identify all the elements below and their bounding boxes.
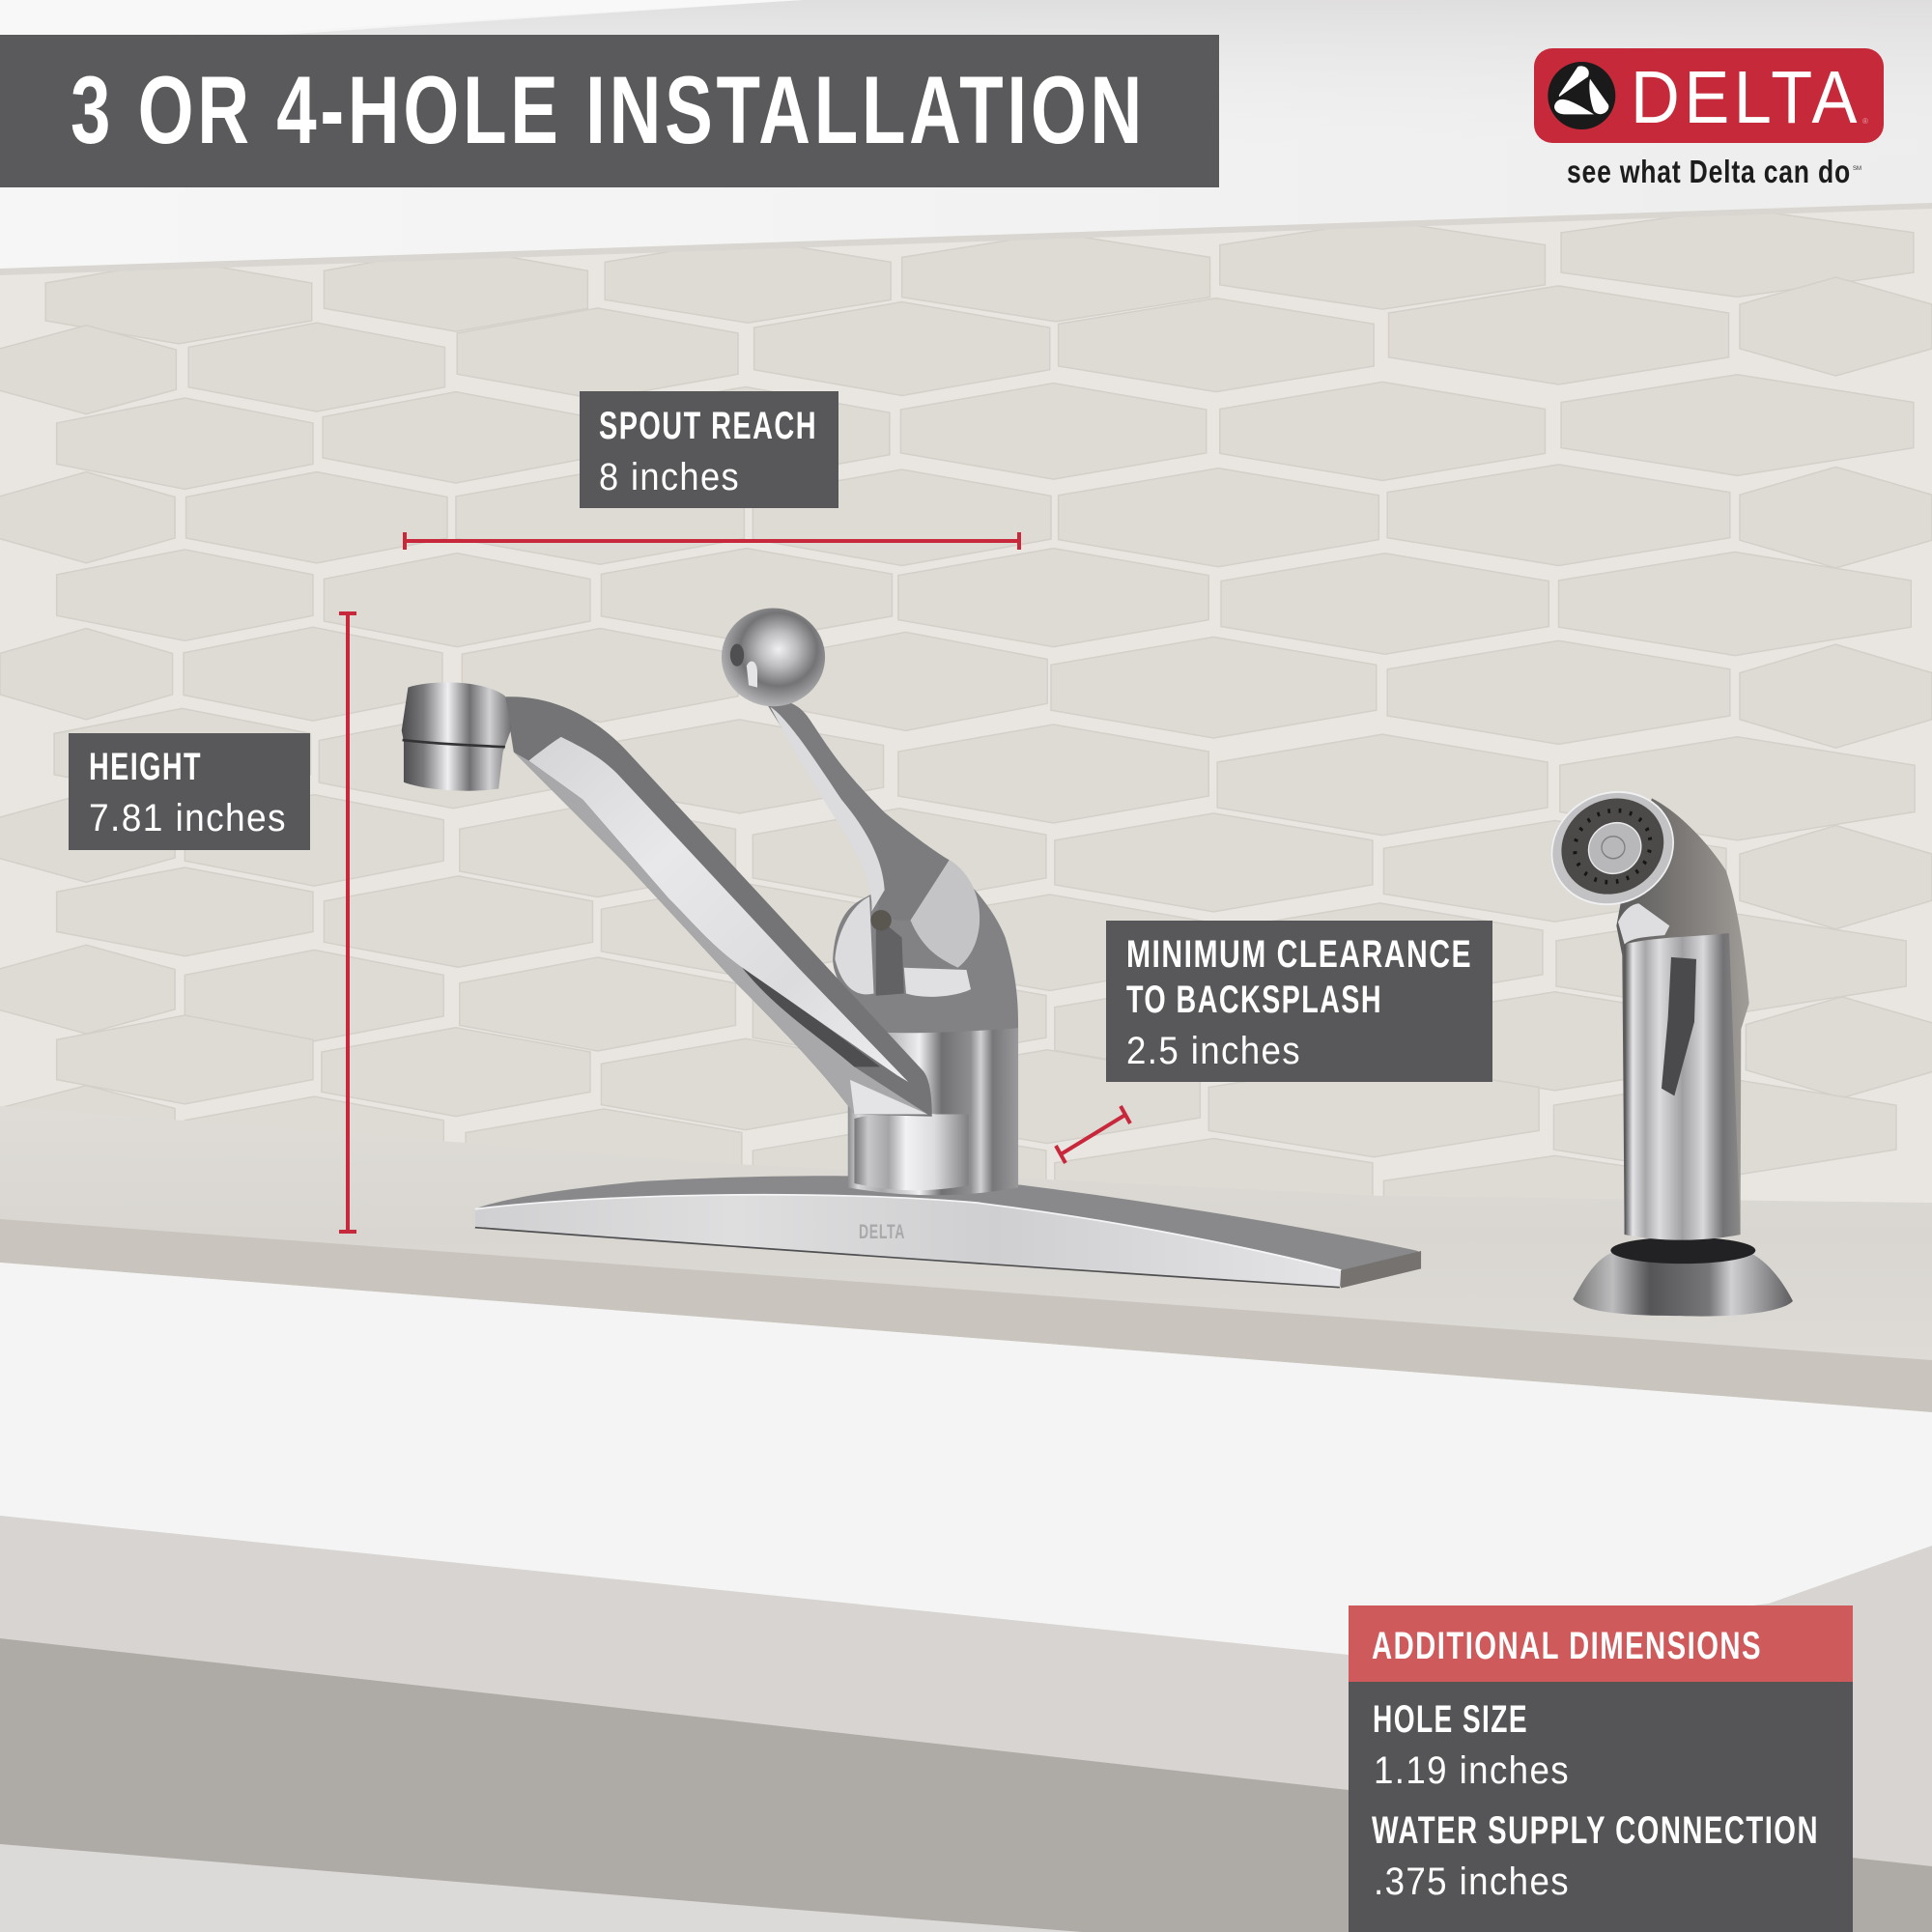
spout reach dimension line	[405, 532, 1019, 550]
water supply value: .375 inches	[1374, 1861, 1570, 1903]
height dimension line	[339, 613, 356, 1232]
spout	[505, 696, 932, 1117]
sprayer holes	[1569, 803, 1656, 890]
sprayer face	[1553, 787, 1671, 905]
upper white shelf wall	[0, 0, 1932, 275]
sprayer stem	[1625, 933, 1741, 1240]
additional dimensions panel	[1349, 1605, 1853, 1932]
clearance label line two: TO BACKSPLASH	[1126, 979, 1382, 1021]
height value: 7.81 inches	[89, 797, 287, 839]
icon: Delta triangle emblem	[1548, 62, 1615, 129]
clearance value: 2.5 inches	[1126, 1030, 1301, 1072]
height label: HEIGHT	[89, 746, 202, 788]
handle set screw	[870, 910, 892, 930]
handle ball	[722, 608, 825, 706]
backsplash tile wall	[0, 193, 1932, 1256]
hole size label: HOLE SIZE	[1373, 1698, 1528, 1741]
faucet column	[848, 1028, 1018, 1195]
spout reach callout	[580, 391, 838, 508]
minimum clearance callout	[1106, 921, 1492, 1082]
registered mark: ®	[1862, 117, 1868, 126]
handle lever	[766, 700, 950, 921]
Delta logo	[1534, 48, 1884, 189]
service mark: SM	[1853, 166, 1861, 172]
clearance dimension line	[1056, 1106, 1130, 1163]
lower counter bottom strip	[0, 1844, 1082, 1932]
countertop front edge	[0, 1219, 1932, 1412]
side sprayer	[1543, 780, 1793, 1317]
panel header	[1349, 1605, 1853, 1682]
sprayer head ring	[1543, 780, 1683, 917]
hole size value: 1.19 inches	[1374, 1749, 1570, 1792]
sprayer black ring	[1610, 1237, 1755, 1264]
height callout	[69, 733, 310, 850]
panel body	[1349, 1682, 1853, 1932]
sprayer center button	[1584, 817, 1645, 879]
faucet	[402, 608, 1018, 1195]
engraved DELTA mark: DELTA	[859, 1221, 905, 1243]
countertop surface	[0, 1106, 1932, 1364]
title banner	[0, 35, 1219, 187]
faucet cap	[833, 856, 1018, 1033]
title: 3 OR 4-HOLE INSTALLATION	[71, 56, 1146, 163]
sprayer base dome	[1573, 1249, 1793, 1317]
DELTA wordmark: DELTA	[1631, 56, 1861, 139]
lower counter surface	[0, 1516, 1932, 1932]
white cabinet front	[0, 1263, 1932, 1739]
spout reach value: 8 inches	[599, 456, 740, 498]
sprayer handle	[1616, 798, 1749, 1235]
tagline: see what Delta can do	[1567, 154, 1851, 189]
aerator	[402, 682, 512, 791]
spout reach label: SPOUT REACH	[599, 405, 817, 447]
lower counter front edge	[0, 1638, 1932, 1932]
faucet collar	[854, 1112, 969, 1190]
panel header: ADDITIONAL DIMENSIONS	[1372, 1625, 1762, 1667]
faucet base plate	[475, 1176, 1421, 1288]
clearance label: MINIMUM CLEARANCE	[1126, 933, 1472, 976]
